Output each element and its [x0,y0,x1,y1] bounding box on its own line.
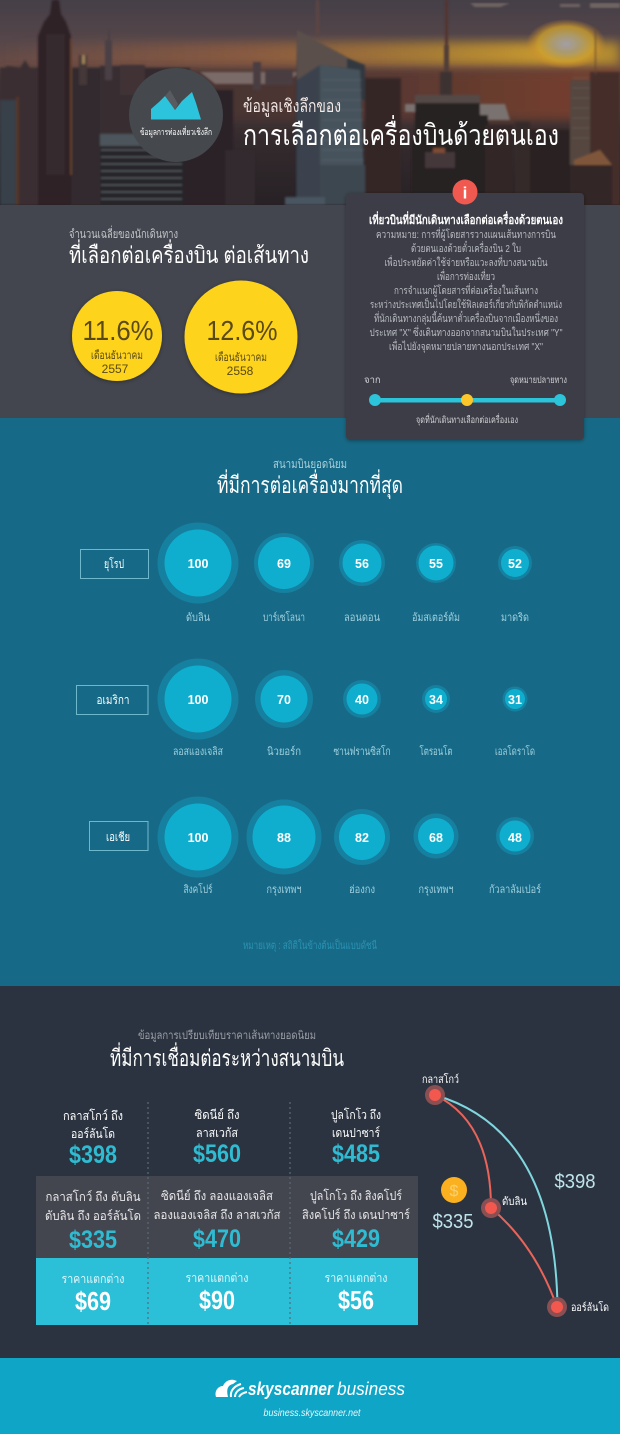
icon: info [452,180,478,204]
row: America: 100 [188,693,208,707]
column: direct fares: $560 [193,1140,241,1168]
column: direct fares [63,1107,381,1169]
panel: average passengers background [0,205,620,418]
logo wordmark: skyscanner [248,1378,334,1399]
stat circle: 2557 [72,291,162,381]
column: connecting fares: $335 [69,1226,117,1254]
panel: price comparison background [0,986,620,1358]
column: direct fares: ซิดนีย์ ถึง [194,1108,240,1122]
panel: airports background [0,418,620,986]
row: Asia: เอเชีย [106,830,130,844]
row: Europe: 56 [355,557,369,571]
node: Orlando: ออร์ลันโด [571,1300,609,1314]
stat circle: 2557: เดือนธันวาคม [91,349,143,362]
icon: mountain chart [151,92,201,120]
subheading: จำนวนเฉลี่ยของนักเดินทาง [69,225,178,241]
column: connecting fares: กลาสโกว์ ถึง ดับลิน [46,1189,141,1204]
row: Europe: อัมสเตอร์ดัม [412,611,460,624]
stat circle: 2557: 2557 [102,362,129,376]
column: fare differences: $56 [338,1285,374,1315]
icon: info: i [463,184,467,202]
price comparison table [36,1102,418,1325]
node: Dublin: ดับลิน [502,1196,527,1208]
column: connecting fares: ลองแองเจลิส ถึง ลาสเวกัส [154,1208,281,1222]
row: America: โตรอนโต [420,744,452,758]
node: Orlando [547,1297,609,1317]
row: America: 34 [429,693,443,707]
row: America: ซานฟรานซิสโก [334,744,390,758]
row: Asia: 48 [508,831,522,845]
card body text: เพื่อไปยังจุดหมายปลายทางนอกประเทศ "X" [389,339,543,353]
row: Europe: ยุโรป [104,557,124,572]
label: direct price: $398 [554,1171,596,1193]
hero section background: city skyline at sunset [0,0,620,205]
row: America: อเมริกา [96,693,130,707]
airports subheading: สนามบินยอดนิยม [273,457,347,471]
column: direct fares: $398 [69,1141,117,1169]
column: connecting fares: ปูลโกโว ถึง สิงคโปร์ [310,1188,402,1204]
row: Asia: 82 [355,831,369,845]
row: America: 40 [355,693,369,707]
column: direct fares: เดนปาซาร์ [332,1126,380,1140]
panel: footer background [0,1358,620,1434]
price section heading: ที่มีการเชื่อมต่อระหว่างสนามบิน [110,1042,344,1071]
node: Glasgow [422,1072,459,1105]
card body text: ที่นักเดินทางกลุ่มนี้ค้นหาตั๋วเครื่องบินจากเมืองหนึ่งของ [374,310,558,325]
node: Glasgow: กลาสโกว์ [422,1072,459,1086]
card body text: เพื่อการท่องเที่ยว [437,269,495,283]
price section subheading: ข้อมูลการเปรียบเทียบราคาเส้นทางยอดนิยม [138,1029,316,1042]
column: fare differences [62,1271,388,1316]
row: Asia: กรุงเทพฯ [418,884,454,896]
column: connecting fares: $470 [193,1225,241,1253]
row: Asia: 68 [429,831,443,845]
row: Europe: บาร์เซโลนา [263,610,305,624]
row: Asia: กัวลาลัมเปอร์ [489,883,541,896]
row: America: นิวยอร์ก [267,745,301,758]
stat circle: 2558 [184,280,298,394]
card body text: ประเทศ "X" ซึ่งเดินทางออกจากสนามบินในประเทศ "Y" [370,325,563,339]
column: connecting fares: สิงคโปร์ ถึง เดนปาซาร์ [302,1207,410,1222]
column: connecting fares [45,1188,410,1254]
icon: coin [441,1177,467,1203]
row: Europe: ดับลิน [186,612,210,624]
column: fare differences: ราคาแตกต่าง [324,1271,388,1285]
panel: average connections per route [69,225,309,394]
stat circle: 2558: เดือนธันวาคม [215,351,267,364]
row: Asia: 100 [188,831,208,845]
row: Asia [90,796,541,896]
heading: ที่เลือกต่อเครื่องบิน ต่อเส้นทาง [69,239,309,268]
row: America: 31 [508,693,522,707]
node: Dublin [481,1196,527,1218]
panel: definition card [346,180,584,440]
icon: skyscanner cloud [216,1380,247,1397]
column: direct fares: ลาสเวกัส [196,1126,238,1140]
label: connecting price: $335 [432,1211,474,1233]
row: America: ลอสแองเจลิส [173,746,223,758]
column: direct fares: กลาสโกว์ ถึง [63,1108,123,1123]
logo descriptor: business [337,1378,405,1399]
column: fare differences: $90 [199,1285,235,1315]
row: America: 70 [277,693,291,707]
column: direct fares: ปูลโกโว ถึง [331,1107,381,1123]
card body text: การจำแนกผู้โดยสารที่ต่อเครื่องในเส้นทาง [394,283,538,297]
row background: connecting fares [36,1176,418,1258]
card body text: เพื่อประหยัดค่าใช้จ่ายหรือแวะลงที่บางสนามบิน [384,255,548,269]
column: fare differences: ราคาแตกต่าง [186,1271,248,1285]
route diagram: จาก [364,375,381,386]
card body text: ความหมาย: การที่ผู้โดยสารวางแผนเส้นทางการบิน [376,227,556,241]
card body text [370,227,563,353]
row: America [76,658,535,758]
route diagram [364,375,567,426]
column: fare differences: ราคาแตกต่าง [62,1272,124,1286]
row background: fare difference [36,1258,418,1325]
route: direct flight [435,1095,558,1307]
card body text: ด้วยตนเองด้วยตั๋วเครื่องบิน 2 ใบ [411,240,521,255]
stat circle: 2557: 11.6% [82,315,154,346]
column: connecting fares: ซิดนีย์ ถึง ลองแองเจลิส [161,1189,273,1203]
column: direct fares: $485 [332,1140,380,1168]
row: America: เอลโดราโด [495,744,535,758]
column: connecting fares: $429 [332,1225,380,1253]
row: Europe: 100 [188,557,208,571]
row: Asia: สิงคโปร์ [183,882,213,896]
footer logo [216,1378,405,1399]
hero subtitle: ข้อมูลเชิงลึกของ [243,96,341,117]
card heading: เที่ยวบินที่มีนักเดินทางเลือกต่อเครื่องด้วยตนเอง [369,211,563,227]
row: Europe: 69 [277,557,291,571]
row: Europe: ลอนดอน [344,612,380,624]
route: connecting flight [435,1095,557,1307]
route map [422,1072,609,1317]
row: Asia: ฮ่องกง [349,884,375,896]
row: Europe: มาดริด [501,612,529,624]
column: fare differences: $69 [75,1286,111,1316]
airports heading: ที่มีการต่อเครื่องมากที่สุด [217,469,403,499]
row: Europe: 52 [508,557,522,571]
row: Europe: 55 [429,557,443,571]
route diagram: จุดหมายปลายทาง [510,375,567,386]
footer url: business.skyscanner.net [264,1408,362,1419]
stat circle: 2558: 2558 [227,364,254,378]
badge label: ข้อมูลการท่องเที่ยวเชิงลึก [140,125,212,138]
column: direct fares: ออร์ลันโด [71,1126,115,1141]
stat circle: 2558: 12.6% [206,315,278,346]
column: connecting fares: ดับลิน ถึง ออร์ลันโด [45,1208,141,1223]
row: Europe [80,522,532,624]
hero badge circle [129,68,223,162]
footnote: หมายเหตุ : สถิติในข้างต้นเป็นแบบดัชนี [243,938,377,952]
row: Asia: กรุงเทพฯ [266,884,302,896]
icon: coin: $ [450,1183,459,1200]
route diagram: จุดที่นักเดินทางเลือกต่อเครื่องเอง [416,413,518,426]
row: Asia: 88 [277,831,291,845]
